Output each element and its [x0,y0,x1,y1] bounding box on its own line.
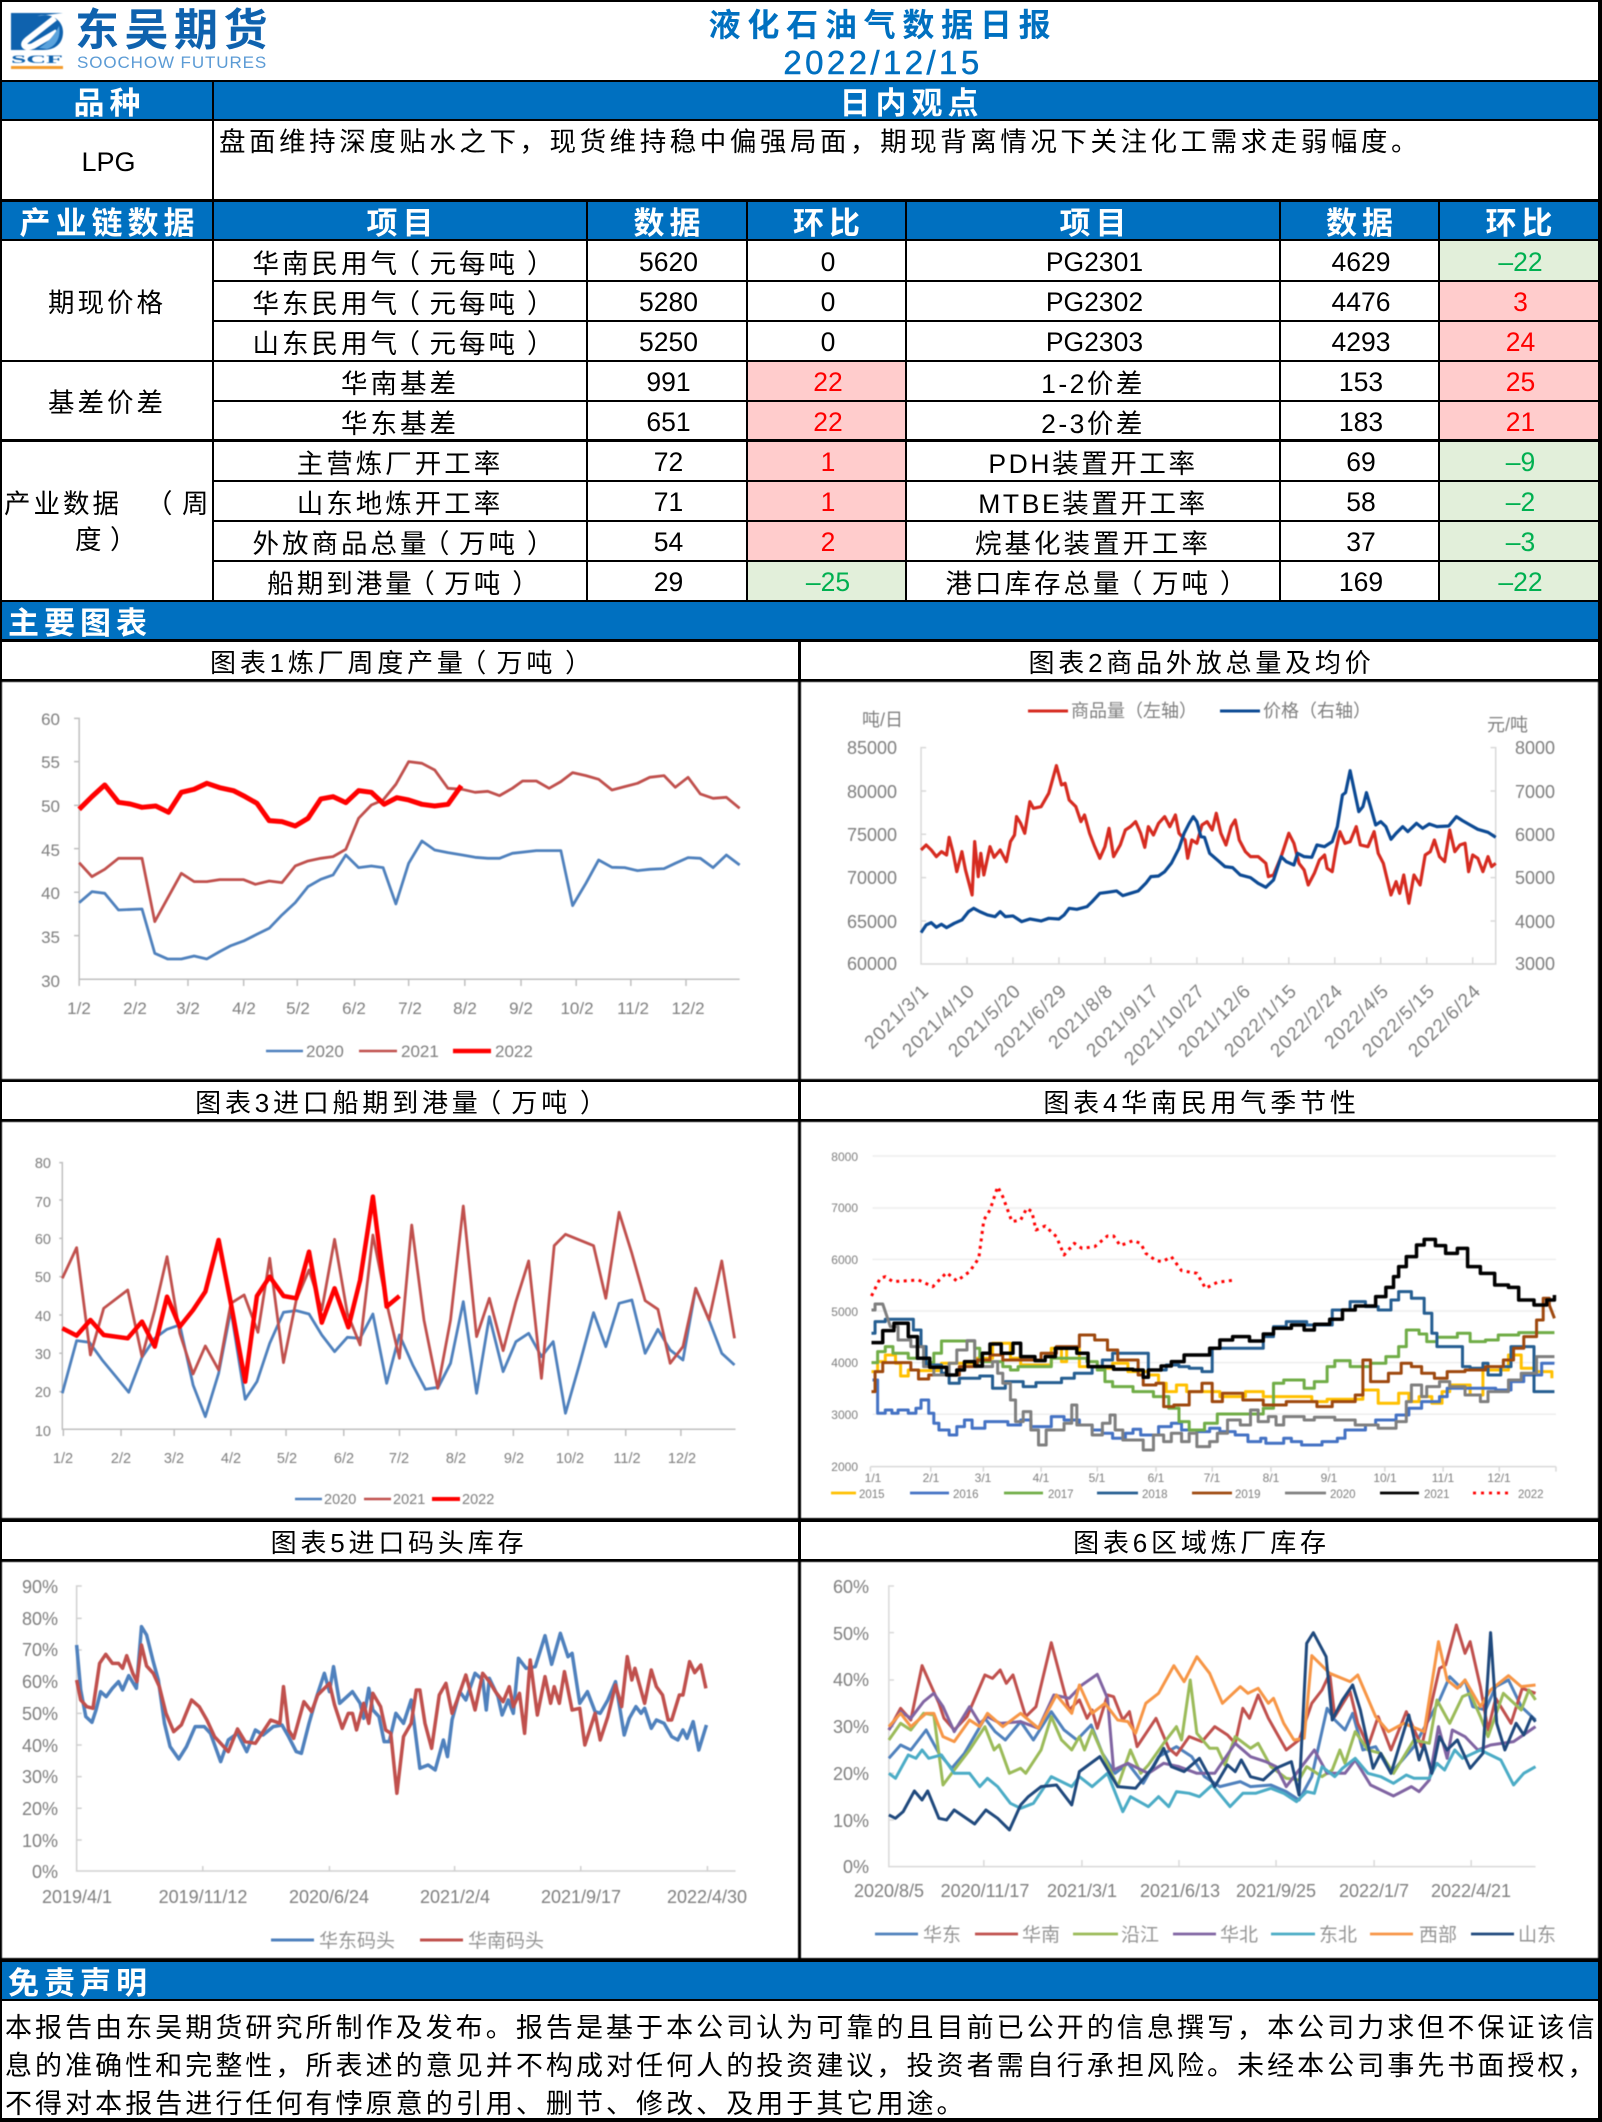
legend: 2018 [1142,1489,1168,1501]
legend: 2022 [462,1492,494,1508]
chart 3: import shipments arriving at port: 4/2 [221,1451,241,1467]
chart 5: import terminal inventory: 40% [22,1736,58,1756]
chart 6: regional refinery inventory: 2022/1/7 [1339,1881,1409,1901]
chart 2: commodity volume and average price: 2021/3/1 [861,981,934,1053]
chart 2: commodity volume and average price: 65000 [847,912,897,932]
chart 5: import terminal inventory: 2020/6/24 [289,1887,369,1907]
data row 3: 5250 [639,327,698,357]
data row 9: 169 [1339,567,1383,597]
data row 5: 183 [1339,406,1383,436]
chart 4: South China LPG seasonality: 7000 [831,1201,858,1215]
chart 3: import shipments arriving at port: 8/2 [446,1451,466,1467]
legend: 2020 [306,1042,344,1061]
chart 2: commodity volume and average price: 2022/4/5 [1321,981,1394,1053]
legend: 2021 [401,1042,439,1061]
data row 9: –25 [806,567,850,597]
chart 4: South China LPG seasonality: 8/1 [1263,1471,1280,1485]
chart 2: commodity volume and average price [801,682,1598,1079]
data row 9: ） [1220,569,1250,599]
LPG view row: LPG [81,146,136,176]
chart 2: commodity volume and average price: 3000 [1515,954,1555,974]
data row 6 [214,442,1598,480]
data row 6: PDH装置开工率 [988,449,1198,479]
title: 液化石油气数据日报 [709,7,1057,43]
chart 6: regional refinery inventory: 20% [833,1764,869,1784]
chart 4: South China LPG seasonality: 9/1 [1321,1471,1338,1485]
data row 6: –9 [1506,447,1535,477]
data row 7: 58 [1346,487,1376,517]
chart title 1 [2,642,798,679]
data row 2: 4476 [1332,287,1390,317]
chart 2: commodity volume and average price: 2022/1/15 [1221,981,1302,1062]
legend: 2020 [324,1492,356,1508]
data row 7 [214,482,1598,520]
legend: 沿江 [1121,1924,1159,1946]
chart 5: import terminal inventory: 70% [22,1640,58,1660]
chart 4: South China LPG seasonality: 2/1 [923,1471,940,1485]
table header: industry chain data: 产业链数据 [20,206,200,241]
chart 3: import shipments arriving at port: 3/2 [164,1451,184,1467]
chart 3: import shipments arriving at port: 12/2 [668,1451,696,1467]
chart 5: import terminal inventory: 2019/4/1 [42,1887,112,1907]
disclaimer text: 息的准确性和完整性，所表述的意见并不构成对任何人的投资建议，投资者需自行承担风险。未经本公司事先书面授权， [5,2051,1598,2081]
chart 1: weekly refinery output: 60 [41,710,60,729]
chart title 5: 图表5进口码头库存 [271,1528,527,1558]
category: industry data weekly: 度 [75,525,104,555]
data row 9: –22 [1498,567,1543,597]
data row 8: 外放商品总量 万吨 [252,529,518,559]
data row 7: MTBE装置开工率 [978,489,1208,519]
legend: 2016 [953,1489,979,1501]
data row 1: ） [527,248,556,278]
legend: 华南 [1022,1924,1060,1946]
chart 4: South China LPG seasonality [801,1122,1598,1518]
category: basis and spreads: 基差价差 [48,388,166,418]
data row 1: 0 [821,246,835,276]
data row 3: （ [394,329,423,359]
chart title 1: ） [565,648,595,678]
data row 4: 153 [1339,367,1383,397]
legend: 华北 [1220,1924,1258,1946]
category: industry data weekly: ） [110,525,140,555]
legend: 2019 [1235,1489,1261,1501]
logo wordmark English: SOOCHOW FUTURES [77,53,267,72]
chart 5: import terminal inventory: 50% [22,1704,58,1724]
chart 4: South China LPG seasonality: 4/1 [1033,1471,1050,1485]
data row 9: 港口库存总量 万吨 [946,569,1211,599]
data row 6: 72 [654,447,683,477]
chart 2: commodity volume and average price: 2021/4/10 [899,981,980,1062]
legend: 华东 [923,1924,961,1946]
chart 1: weekly refinery output: 1/2 [67,999,91,1018]
chart title 3: （ [475,1088,505,1118]
legend: 华南码头 [468,1930,544,1952]
chart 4: South China LPG seasonality: 7/1 [1204,1471,1221,1485]
data row 8: –3 [1506,527,1535,557]
data row 5 [214,402,1598,439]
category: industry data weekly: （ [146,489,176,519]
chart 2: commodity volume and average price: 吨/日 [862,710,903,730]
legend: 2015 [859,1489,885,1501]
chart 2: commodity volume and average price: 6000 [1515,825,1555,845]
legend: 西部 [1419,1924,1457,1946]
chart 6: regional refinery inventory: 2020/11/17 [941,1881,1029,1901]
chart 1: weekly refinery output: 3/2 [176,999,200,1018]
legend: 价格（右轴） [1263,701,1371,721]
data row 1: 华南民用气 元每吨 [252,248,518,278]
data row 6: 1 [821,447,835,477]
legend: 2020 [1330,1489,1356,1501]
data row 6: 69 [1346,447,1376,477]
chart 6: regional refinery inventory: 2021/6/13 [1140,1881,1220,1901]
chart 2: commodity volume and average price: 60000 [847,954,897,974]
chart 1: weekly refinery output: 11/2 [617,999,649,1018]
data row 3: ） [527,329,556,359]
data row 2: （ [394,289,423,319]
data row 1: PG2301 [1046,246,1143,276]
data row 1: 4629 [1332,246,1390,276]
chart 5: import terminal inventory: 90% [22,1577,58,1597]
chart 3: import shipments arriving at port: 70 [35,1195,51,1211]
chart 1: weekly refinery output: 5/2 [286,999,310,1018]
data row 2: 3 [1513,287,1528,317]
chart 1: weekly refinery output: 45 [41,841,60,860]
chart 4: South China LPG seasonality: 2000 [831,1460,858,1474]
chart 2: commodity volume and average price: 2021/9/17 [1083,981,1164,1062]
chart 6: regional refinery inventory: 60% [833,1577,869,1597]
chart title 6 [801,1522,1598,1559]
data row 5: 651 [646,406,691,436]
chart 3: import shipments arriving at port: 1/2 [53,1451,73,1467]
chart 1: weekly refinery output: 30 [41,972,60,991]
chart 2: commodity volume and average price: 元/吨 [1487,715,1528,735]
data row 4: 991 [646,367,691,397]
disclaimer text: 本报告由东吴期货研究所制作及发布。报告是基于本公司认为可靠的且目前已公开的信息撰写，本公司力求但不保证该信 [5,2013,1598,2043]
data row 7: 71 [654,487,683,517]
data row 3: PG2303 [1046,327,1143,357]
data row 9 [214,562,1598,600]
category: spot and futures prices: 期现价格 [48,288,166,318]
chart 3: import shipments arriving at port: 20 [35,1385,51,1401]
chart 5: import terminal inventory: 20% [22,1799,58,1819]
chart 4: South China LPG seasonality: 1/1 [865,1471,882,1485]
chart 5: import terminal inventory: 80% [22,1609,58,1629]
chart 2: commodity volume and average price: 2021/8/8 [1045,981,1118,1053]
chart 2: commodity volume and average price: 2021/5/20 [945,981,1026,1062]
data row 6: 主营炼厂开工率 [297,449,503,479]
data row 3: 山东民用气 元每吨 [252,329,518,359]
chart 5: import terminal inventory: 0% [32,1862,58,1882]
chart title 2 [801,642,1598,679]
chart 4: South China LPG seasonality: 11/1 [1432,1471,1455,1485]
chart 2: commodity volume and average price: 2021/12/6 [1175,981,1256,1062]
chart 6: regional refinery inventory: 50% [833,1624,869,1644]
data row 7: 1 [821,487,835,517]
data row 4 [214,362,1598,400]
data row 7: –2 [1506,487,1535,517]
category: spot and futures prices [2,241,212,360]
chart 2: commodity volume and average price: 4000 [1515,912,1555,932]
LPG view row: 盘面维持深度贴水之下，现货维持稳中偏强局面，期现背离情况下关注化工需求走弱幅度。 [219,127,1421,157]
chart title 3 [2,1082,798,1119]
table header: industry chain data: 环比 [1486,206,1558,241]
legend [875,1924,1556,1946]
data row 8: （ [423,529,452,559]
data row 8: 2 [821,527,835,557]
chart 1: weekly refinery output: 6/2 [342,999,366,1018]
data row 5: 华东基差 [341,408,459,438]
chart 3: import shipments arriving at port [2,1122,798,1518]
data row 1: 5620 [639,246,698,276]
table header: variety and intraday view [2,82,1598,121]
chart 5: import terminal inventory: 2022/4/30 [667,1887,747,1907]
chart 3: import shipments arriving at port: 50 [35,1270,51,1286]
table header: industry chain data: 数据 [1326,206,1398,241]
chart 4: South China LPG seasonality: 8000 [831,1150,858,1164]
data row 8: 54 [654,527,683,557]
data row 3: 24 [1506,327,1535,357]
data row 5: 22 [813,406,843,436]
chart 6: regional refinery inventory: 30% [833,1717,869,1737]
table header: variety and intraday view: 日内观点 [840,86,984,121]
chart title 2: 图表2商品外放总量及均价 [1028,648,1375,678]
chart title 4 [801,1082,1598,1119]
chart 2: commodity volume and average price: 2022/6/24 [1405,981,1486,1062]
data row 1: （ [394,248,423,278]
chart title 5 [2,1522,798,1559]
chart 2: commodity volume and average price: 5000 [1515,868,1555,888]
chart 6: regional refinery inventory: 10% [833,1811,869,1831]
chart 5: import terminal inventory: 30% [22,1767,58,1787]
chart 5: import terminal inventory: 2021/2/4 [420,1887,490,1907]
data row 1: –22 [1498,246,1543,276]
data row 8: 烷基化装置开工率 [975,529,1211,559]
data row 4: 华南基差 [341,369,459,399]
category: industry data weekly: 周 [182,489,212,519]
section heading: main charts [2,602,1598,639]
table header: industry chain data: 项目 [1060,206,1132,241]
chart 5: import terminal inventory: 10% [22,1831,58,1851]
chart 5: import terminal inventory [2,1562,798,1958]
report date: 2022/12/15 [783,44,983,81]
legend [295,1492,494,1508]
data row 4: 25 [1506,367,1535,397]
chart 4: South China LPG seasonality: 5/1 [1089,1471,1106,1485]
chart 1: weekly refinery output: 35 [41,928,60,947]
LPG view row [2,121,1598,199]
category: industry data weekly: 产业数据 [4,489,122,519]
data row 2: ） [527,289,556,319]
legend: 2021 [1424,1489,1450,1501]
data row 2 [214,282,1598,320]
legend [266,1042,533,1061]
chart 3: import shipments arriving at port: 30 [35,1347,51,1363]
chart 6: regional refinery inventory [801,1562,1598,1958]
chart 6: regional refinery inventory: 40% [833,1670,869,1690]
chart 3: import shipments arriving at port: 9/2 [504,1451,524,1467]
data row 2: PG2302 [1046,287,1143,317]
chart 4: South China LPG seasonality: 3/1 [975,1471,992,1485]
chart 2: commodity volume and average price: 70000 [847,868,897,888]
chart 4: South China LPG seasonality: 6000 [831,1253,858,1267]
data row 9: ） [512,569,542,599]
chart 2: commodity volume and average price: 2022/2/24 [1267,981,1348,1062]
chart 2: commodity volume and average price: 8000 [1515,738,1555,758]
data row 2: 5280 [639,287,698,317]
section heading: disclaimer: 免责声明 [8,1966,152,2001]
legend [831,1489,1544,1501]
chart 3: import shipments arriving at port: 10/2 [556,1451,584,1467]
data row 3 [214,322,1598,360]
legend: 2022 [495,1042,533,1061]
chart 4: South China LPG seasonality: 12/1 [1487,1471,1511,1485]
icon: company mark [10,12,64,70]
data row 4: 22 [813,367,843,397]
chart 4: South China LPG seasonality: 10/1 [1373,1471,1397,1485]
table header: industry chain data: 项目 [366,206,438,241]
table header: industry chain data: 数据 [634,206,706,241]
disclaimer text [2,2001,1598,2118]
legend: 华东码头 [319,1930,395,1952]
chart 4: South China LPG seasonality: 3000 [831,1408,858,1422]
data row 4: 1-2价差 [1041,369,1145,399]
logo: Soochow Futures [10,6,273,72]
chart 5: import terminal inventory: 2021/9/17 [541,1887,621,1907]
legend [1028,701,1371,721]
category: basis and spreads [2,362,212,439]
chart 1: weekly refinery output: 40 [41,884,60,903]
data row 1 [214,241,1598,280]
chart title 1: （ [460,648,490,678]
section heading: disclaimer [2,1962,1598,1999]
section heading: main charts: 主要图表 [8,606,152,641]
table header: industry chain data [2,202,1598,241]
legend: 2021 [393,1492,425,1508]
chart 5: import terminal inventory: 60% [22,1672,58,1692]
chart 1: weekly refinery output: 9/2 [509,999,533,1018]
data row 3: 4293 [1332,327,1390,357]
chart 6: regional refinery inventory: 2022/4/21 [1431,1881,1511,1901]
chart 2: commodity volume and average price: 80000 [847,782,897,802]
chart 4: South China LPG seasonality: 5000 [831,1305,858,1319]
chart 4: South China LPG seasonality: 4000 [831,1356,858,1370]
chart 3: import shipments arriving at port: 11/2 [613,1451,641,1467]
data row 7: 山东地炼开工率 [297,489,503,519]
data row 2: 华东民用气 元每吨 [252,289,518,319]
chart 1: weekly refinery output: 4/2 [232,999,256,1018]
chart title 6: 图表6区域炼厂库存 [1073,1528,1330,1558]
legend: 2022 [1518,1489,1544,1501]
table header: variety and intraday view: 品种 [74,86,146,121]
chart title 3: 图表3进口船期到港量 万吨 [195,1088,571,1118]
data row 9: （ [408,569,438,599]
chart 3: import shipments arriving at port: 10 [35,1424,51,1440]
chart 1: weekly refinery output: 12/2 [671,999,705,1018]
chart 2: commodity volume and average price: 75000 [847,825,897,845]
legend: 2017 [1048,1489,1074,1501]
chart 3: import shipments arriving at port: 60 [35,1232,51,1248]
chart 2: commodity volume and average price: 2021/6/29 [991,981,1072,1062]
chart 1: weekly refinery output: 55 [41,753,60,772]
data row 5: 21 [1506,406,1535,436]
chart 1: weekly refinery output: 2/2 [123,999,147,1018]
chart 6: regional refinery inventory: 2021/9/25 [1236,1881,1316,1901]
chart 1: weekly refinery output: 8/2 [453,999,477,1018]
chart 1: weekly refinery output [2,682,798,1079]
chart 2: commodity volume and average price: 2021/10/27 [1120,981,1210,1070]
chart 1: weekly refinery output: 50 [41,797,60,816]
data row 3: 0 [821,327,835,357]
chart 1: weekly refinery output: 7/2 [398,999,422,1018]
chart title 4: 图表4华南民用气季节性 [1043,1088,1360,1118]
chart 3: import shipments arriving at port: 2/2 [111,1451,131,1467]
data row 2: 0 [821,287,835,317]
legend: 商品量（左轴） [1071,701,1197,721]
chart 2: commodity volume and average price: 85000 [847,738,897,758]
chart title 3: ） [580,1088,610,1118]
chart 3: import shipments arriving at port: 5/2 [277,1451,297,1467]
chart 2: commodity volume and average price: 7000 [1515,782,1555,802]
logo wordmark Chinese: 东吴期货 [75,6,273,55]
chart 3: import shipments arriving at port: 6/2 [334,1451,354,1467]
data row 8 [214,522,1598,560]
chart 1: weekly refinery output: 10/2 [560,999,594,1018]
legend: 山东 [1518,1924,1556,1946]
legend: 东北 [1319,1924,1357,1946]
data row 9: （ [1116,569,1146,599]
chart 5: import terminal inventory: 2019/11/12 [159,1887,247,1907]
chart 3: import shipments arriving at port: 80 [35,1156,51,1172]
chart 6: regional refinery inventory: 2021/3/1 [1047,1881,1117,1901]
chart 6: regional refinery inventory: 2020/8/5 [854,1881,924,1901]
chart 2: commodity volume and average price: 2022/5/15 [1359,981,1440,1062]
data row 8: ） [527,529,556,559]
data row 8: 37 [1346,527,1376,557]
data row 9: 船期到港量 万吨 [267,569,503,599]
category: industry data weekly [2,442,212,600]
table header: industry chain data: 环比 [793,206,865,241]
chart 4: South China LPG seasonality: 6/1 [1148,1471,1165,1485]
chart 3: import shipments arriving at port: 40 [35,1309,51,1325]
legend [271,1930,544,1952]
icon: company mark: SCF [11,52,63,66]
chart title 1: 图表1炼厂周度产量 万吨 [210,648,556,678]
chart 3: import shipments arriving at port: 7/2 [389,1451,409,1467]
header: logo and report title [2,2,1598,80]
chart 6: regional refinery inventory: 0% [843,1857,869,1877]
data row 9: 29 [654,567,683,597]
data row 5: 2-3价差 [1041,408,1145,438]
